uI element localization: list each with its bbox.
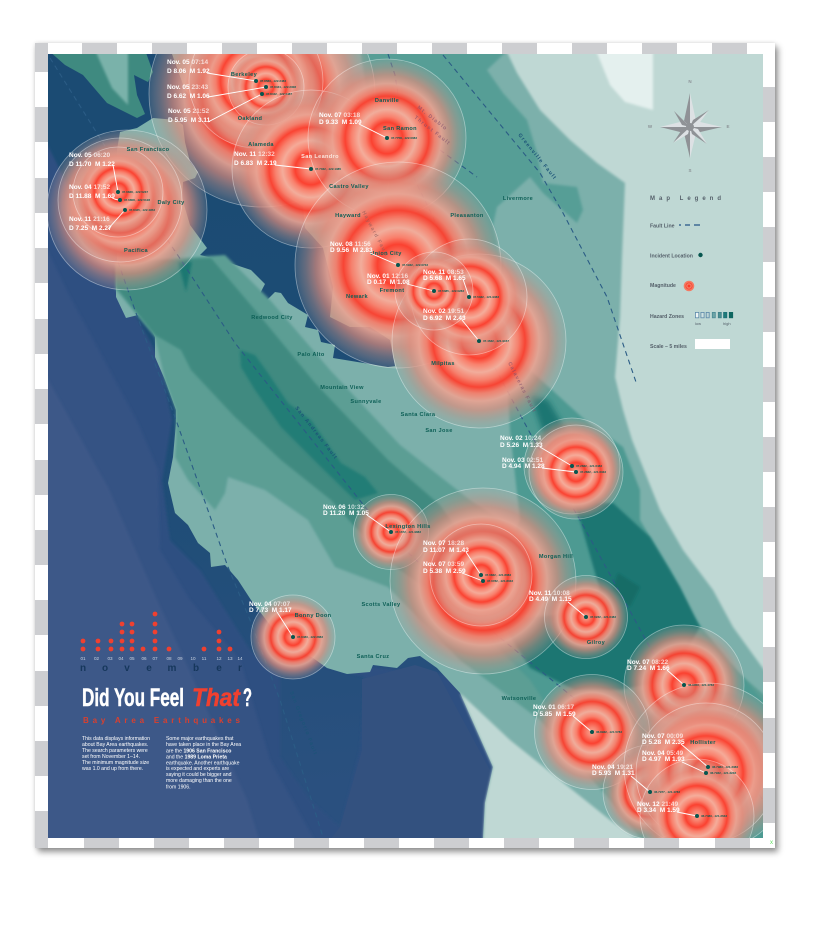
- city labels: Palo Alto: [297, 352, 325, 358]
- dot chart day labels: 03: [107, 656, 113, 661]
- ocean lightest band: [48, 384, 256, 838]
- city labels: San Francisco: [127, 147, 170, 153]
- earthquake labels: D 5.26 M 1.33: [500, 442, 543, 449]
- earthquake labels: D 9.33 M 1.09: [319, 119, 362, 126]
- earthquake labels: Nov. 11 10:08: [529, 590, 570, 597]
- earthquake labels: D 7.25 M 2.27: [69, 225, 112, 232]
- hazard zone: san andreas core: [240, 350, 378, 500]
- land: peninsula, east bay and south county: [116, 50, 770, 838]
- fault line labels under quakes: [288, 132, 558, 756]
- pale patch: northeast: [595, 48, 653, 110]
- legend: scale: Scale – 5 miles: [650, 344, 687, 350]
- dot chart day labels: 02: [94, 656, 99, 661]
- earthquake labels: D 5.85 M 1.59: [533, 711, 576, 718]
- coordinates: 37.5332, -121.9383: [473, 295, 499, 299]
- city labels: Santa Cruz: [357, 654, 389, 660]
- earthquake magnitude zones: [48, 54, 763, 838]
- light streak north bay: [95, 50, 128, 105]
- dot chart day labels: 10: [190, 656, 196, 661]
- earthquake labels: D 7.73 M 1.17: [249, 607, 292, 614]
- city labels: Oakland: [238, 116, 262, 122]
- earthquake labels: D 9.56 M 2.83: [330, 247, 373, 254]
- city labels: Newark: [346, 294, 369, 300]
- city labels: Sunnyvale: [350, 399, 382, 405]
- coordinates: 37.2832, -121.6483: [576, 464, 602, 468]
- city labels: Alameda: [248, 142, 274, 148]
- dot chart day labels: 05: [129, 656, 135, 661]
- legend title: Map Legend: [650, 196, 721, 202]
- dot chart day labels: 12: [216, 656, 222, 661]
- coordinates: 36.7983, -121.3383: [712, 765, 738, 769]
- intro text: about Bay Area earthquakes.: [82, 742, 148, 748]
- earthquake labels: D 6.62 M 1.06: [167, 93, 210, 100]
- intro text: This data displays information: [82, 736, 150, 742]
- legend: hazard zones: [650, 312, 733, 326]
- coordinates: 37.7758, -122.0083: [391, 136, 417, 140]
- earthquake labels: Nov. 08 11:56: [330, 241, 371, 248]
- earthquake labels: D 4.94 M 1.28: [502, 463, 545, 470]
- fault labels over quakes: Calaveras Fault: [506, 361, 537, 414]
- checkered border: [35, 43, 775, 848]
- earthquake labels: D 4.97 M 1.93: [642, 756, 685, 763]
- dot chart day labels: [80, 656, 243, 661]
- coordinates: 37.6808, -122.5128: [124, 198, 150, 202]
- earthquake labels: Nov. 01 12:16: [367, 273, 408, 280]
- legend: magnitude: [650, 281, 694, 291]
- ocean: [48, 54, 444, 828]
- earthquake labels: D 11.88 M 1.69: [69, 193, 115, 200]
- city labels: Scotts Valley: [361, 602, 401, 608]
- coordinates: 37.0782, -121.8033: [487, 579, 513, 583]
- coordinates: 36.7483, -121.2633: [701, 814, 727, 818]
- light zone: south coast: [460, 693, 645, 845]
- legend: hazard zones: Hazard Zones: [650, 314, 684, 320]
- ocean west band: [40, 235, 320, 850]
- month label: e: [216, 663, 222, 674]
- coordinates: 37.1672, -121.9883: [395, 530, 421, 534]
- fault labels over quakes: Thrust Fault: [413, 115, 451, 147]
- city labels: Mountain View: [320, 385, 364, 391]
- city labels: Lexington Hills: [385, 524, 431, 530]
- coordinates: 37.6425, -122.4953: [129, 208, 155, 212]
- history text: is expected and experts are: [166, 766, 229, 772]
- earthquake labels: D 5.38 M 2.59: [423, 568, 466, 575]
- subtitle: Bay Area Earthquakes: [83, 716, 241, 725]
- coordinates: 37.6838, -122.5237: [122, 190, 148, 194]
- history text: and the 1989 Loma Prieta: [166, 754, 227, 760]
- coordinates: 37.7032, -122.1385: [315, 167, 341, 171]
- coordinates: 37.8442, -122.2487: [266, 92, 292, 96]
- dot chart day labels: 14: [237, 656, 243, 661]
- earthquake labels: [69, 59, 685, 814]
- earthquake labels: D 5.28 M 2.35: [642, 739, 685, 746]
- earthquake labels: D 11.70 M 1.22: [69, 161, 115, 168]
- fault lines: [50, 54, 650, 834]
- earthquake leader lines: [108, 73, 708, 816]
- map legend: [650, 196, 733, 350]
- earthquake labels: Nov. 07 08:22: [627, 659, 668, 666]
- page frame with shadow: [35, 43, 775, 848]
- corner crop mark: x: [770, 840, 773, 846]
- dark hazard band: calaveras lower: [500, 503, 700, 690]
- earthquake labels: Nov. 01 06:17: [533, 704, 574, 711]
- earthquake labels: D 7.24 M 1.66: [627, 665, 670, 672]
- ocean mid depth band: [48, 146, 445, 701]
- earthquake labels: Nov. 11 12:32: [234, 151, 275, 158]
- earthquake labels: Nov. 04 07:07: [249, 601, 290, 608]
- city labels: Santa Clara: [401, 412, 436, 418]
- coordinates: 37.8583, -122.2483: [260, 79, 286, 83]
- legend: magnitude: Magnitude: [650, 283, 676, 289]
- city labels: Watsonville: [502, 696, 536, 702]
- intro text: was 1.0 and up from there.: [82, 766, 143, 772]
- coordinates: 37.0232, -121.6483: [590, 615, 616, 619]
- legend: fault line: Fault Line: [650, 224, 675, 230]
- coordinates: 37.4632, -121.9167: [483, 339, 509, 343]
- dot chart day labels: 11: [202, 656, 207, 661]
- earthquake labels: Nov. 11 21:16: [69, 216, 110, 223]
- history text: more damaging than the one: [166, 778, 232, 784]
- land: marin headlands: [48, 50, 153, 118]
- coordinates: 36.7932, -121.3248: [710, 771, 736, 775]
- city labels: Pleasanton: [450, 213, 484, 219]
- hazard zone: north east teal: [360, 54, 584, 259]
- coordinates: 37.2832, -121.6333: [580, 470, 606, 474]
- city labels: Union City: [370, 251, 402, 257]
- earthquake labels: Nov. 07 00:09: [642, 733, 683, 740]
- city labels: Berkeley: [231, 72, 258, 78]
- earthquake labels: Nov. 07 03:18: [319, 112, 360, 119]
- city labels: San Jose: [425, 428, 453, 434]
- month label: e: [146, 663, 152, 674]
- month label: m: [168, 663, 177, 674]
- month label: o: [102, 663, 108, 674]
- city labels: [124, 72, 716, 746]
- earthquake labels: D 5.68 M 1.65: [423, 275, 466, 282]
- title: Did You Feel: [82, 684, 184, 712]
- month label: n: [80, 663, 86, 674]
- earthquake labels: D 11.20 M 1.05: [323, 510, 369, 517]
- land zone: peninsula dark band: [116, 257, 446, 574]
- coordinates: 36.7977, -121.4783: [654, 790, 680, 794]
- city labels: Gilroy: [587, 640, 606, 646]
- month label: [80, 663, 242, 674]
- earthquake labels: Nov. 11 08:53: [423, 269, 464, 276]
- earthquake labels: Nov. 02 19:51: [423, 308, 464, 315]
- fault labels over quakes: Mt. Diablo: [416, 105, 448, 132]
- fault line labels under quakes: San Gregorio Fault: [288, 691, 318, 756]
- earthquake labels: Nov. 02 10:24: [500, 435, 541, 442]
- light zone: east valley: [505, 48, 775, 685]
- title: ?: [243, 684, 252, 712]
- dot chart day labels: 07: [152, 656, 158, 661]
- legend: hazard zones: high: [723, 321, 731, 326]
- compass rose: [648, 79, 730, 173]
- dot chart day labels: 01: [80, 656, 86, 661]
- dot chart day labels: 04: [118, 656, 124, 661]
- earthquake labels: D 0.17 M 1.08: [367, 279, 410, 286]
- intro text: The search parameters were: [82, 748, 148, 754]
- earthquake labels: Nov. 05 07:14: [167, 59, 208, 66]
- earthquake labels: Nov. 05 21:52: [168, 108, 209, 115]
- dot chart day labels: 06: [141, 656, 147, 661]
- earthquake labels: D 5.95 M 3.11: [168, 117, 211, 124]
- city labels: Bonny Doon: [295, 613, 332, 619]
- earthquake labels: D 4.49 M 1.15: [529, 596, 572, 603]
- history text: from 1906.: [166, 784, 191, 790]
- history text: saying it could be bigger and: [166, 772, 232, 778]
- title: That: [192, 684, 242, 712]
- dark hazard band: calaveras upper: [530, 395, 577, 516]
- earthquake labels: D 11.07 M 1.43: [423, 547, 469, 554]
- earthquake labels: D 6.92 M 2.43: [423, 315, 466, 322]
- legend: hazard zones: low: [695, 321, 701, 326]
- dot chart day labels: 08: [166, 656, 172, 661]
- history text: earthquake. Another earthquake: [166, 760, 240, 766]
- city labels: Danville: [375, 98, 399, 104]
- city labels: Hollister: [690, 740, 716, 746]
- compass rose: W: [648, 124, 653, 129]
- earthquake labels: D 8.06 M 1.92: [167, 68, 210, 75]
- coordinates: 37.5385, -122.0283: [438, 289, 464, 293]
- dot chart day labels: 09: [177, 656, 183, 661]
- earthquake labels: Nov. 12 21:49: [637, 801, 678, 808]
- earthquake labels: Nov. 04 17:52: [69, 184, 110, 191]
- city labels: Milpitas: [431, 361, 455, 367]
- coordinates: 37.0832, -121.8083: [485, 573, 511, 577]
- city labels: Morgan Hill: [539, 554, 573, 560]
- fault labels over quakes: [360, 105, 537, 414]
- coordinates: 37.8434, -122.2308: [270, 85, 296, 89]
- history text: have taken place in the Bay Area: [166, 742, 241, 748]
- intro text: set from November 1–14.: [82, 754, 140, 760]
- coordinates: 36.9053, -121.4783: [688, 683, 714, 687]
- incident location dots: [116, 79, 710, 818]
- earthquake labels: Nov. 04 05:49: [642, 750, 683, 757]
- fault labels over quakes: Hayward Fault: [360, 210, 390, 258]
- month label: v: [124, 663, 130, 674]
- history text: [166, 736, 241, 790]
- earthquake labels: Nov. 05 06:20: [69, 152, 110, 159]
- earthquake labels: Nov. 04 19:21: [592, 764, 633, 771]
- hazard zone: calaveras corridor: [508, 375, 763, 838]
- intro text: The minimum magnitude size: [82, 760, 149, 766]
- city labels: Pacifica: [124, 248, 149, 254]
- city labels: Redwood City: [251, 315, 293, 321]
- dot chart day labels: 13: [227, 656, 233, 661]
- legend: fault line: [650, 224, 700, 230]
- ocean bay south: [362, 665, 438, 724]
- map base: [40, 48, 775, 850]
- earthquake labels: D 5.93 M 1.31: [592, 770, 635, 777]
- city labels: San Ramon: [383, 126, 417, 132]
- earthquake labels: D 6.83 M 2.19: [234, 160, 277, 167]
- fault line labels under quakes: San Andreas Fault: [293, 406, 339, 461]
- dot chart: earthquakes per day: [81, 612, 232, 651]
- earthquake labels: Nov. 07 18:28: [423, 540, 464, 547]
- compass rose: S: [688, 168, 692, 173]
- fault line labels under quakes: Greenville Fault: [516, 132, 558, 181]
- legend: incident location: Incident Location: [650, 254, 693, 260]
- history text: Some major earthquakes that: [166, 736, 234, 742]
- coordinates: [122, 79, 738, 818]
- city labels: Daly City: [157, 200, 185, 206]
- compass rose: N: [688, 79, 692, 84]
- earthquake labels: Nov. 05 23:43: [167, 84, 208, 91]
- coordinates: 37.5932, -122.0733: [402, 263, 428, 267]
- darkest spot: [614, 574, 638, 605]
- small dark hazard spot: [178, 262, 192, 292]
- history text: are the 1906 San Francisco: [166, 748, 231, 754]
- legend: scale: [650, 339, 730, 350]
- coordinates: 36.8932, -121.5783: [596, 730, 622, 734]
- city labels: Fremont: [380, 288, 404, 294]
- city labels: Castro Valley: [329, 184, 369, 190]
- city labels: San Leandro: [301, 154, 339, 160]
- earthquake labels: D 3.34 M 1.59: [637, 807, 680, 814]
- month label: b: [193, 663, 199, 674]
- land zone: peninsula mid band: [116, 255, 770, 838]
- earthquake labels: Nov. 07 03:59: [423, 561, 464, 568]
- city labels: Livermore: [503, 196, 533, 202]
- earthquake labels: Nov. 06 10:32: [323, 504, 364, 511]
- month label: r: [238, 663, 242, 674]
- earthquake labels: Nov. 03 02:51: [502, 457, 543, 464]
- city labels: Hayward: [335, 213, 361, 219]
- intro text: [82, 736, 150, 772]
- coordinates: 37.0483, -122.2883: [297, 635, 323, 639]
- compass rose: E: [726, 124, 730, 129]
